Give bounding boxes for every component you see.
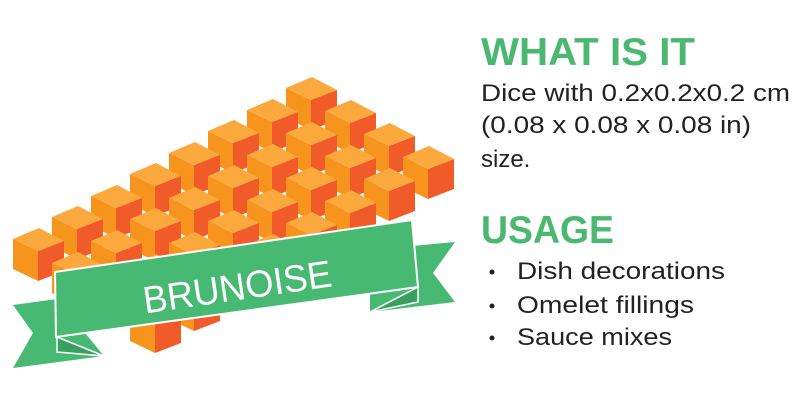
text block: description: (0.08 x 0.08 x 0.08 in) <box>481 112 751 139</box>
text block: description: Dice with 0.2x0.2x0.2 cm <box>481 80 790 107</box>
cube pile <box>13 77 454 353</box>
text block: description: size. <box>481 146 530 173</box>
list: usage items: Omelet fillings <box>517 292 694 319</box>
banner: BRUNOISE <box>13 220 455 368</box>
list: usage items: Sauce mixes <box>517 324 672 351</box>
heading: what is it: WHAT IS IT <box>481 31 695 74</box>
heading: usage: USAGE <box>481 209 614 252</box>
list: usage items <box>490 258 725 351</box>
banner: BRUNOISE: BRUNOISE <box>140 253 334 322</box>
text block: description <box>481 80 790 173</box>
list: usage items: Dish decorations <box>517 258 725 285</box>
